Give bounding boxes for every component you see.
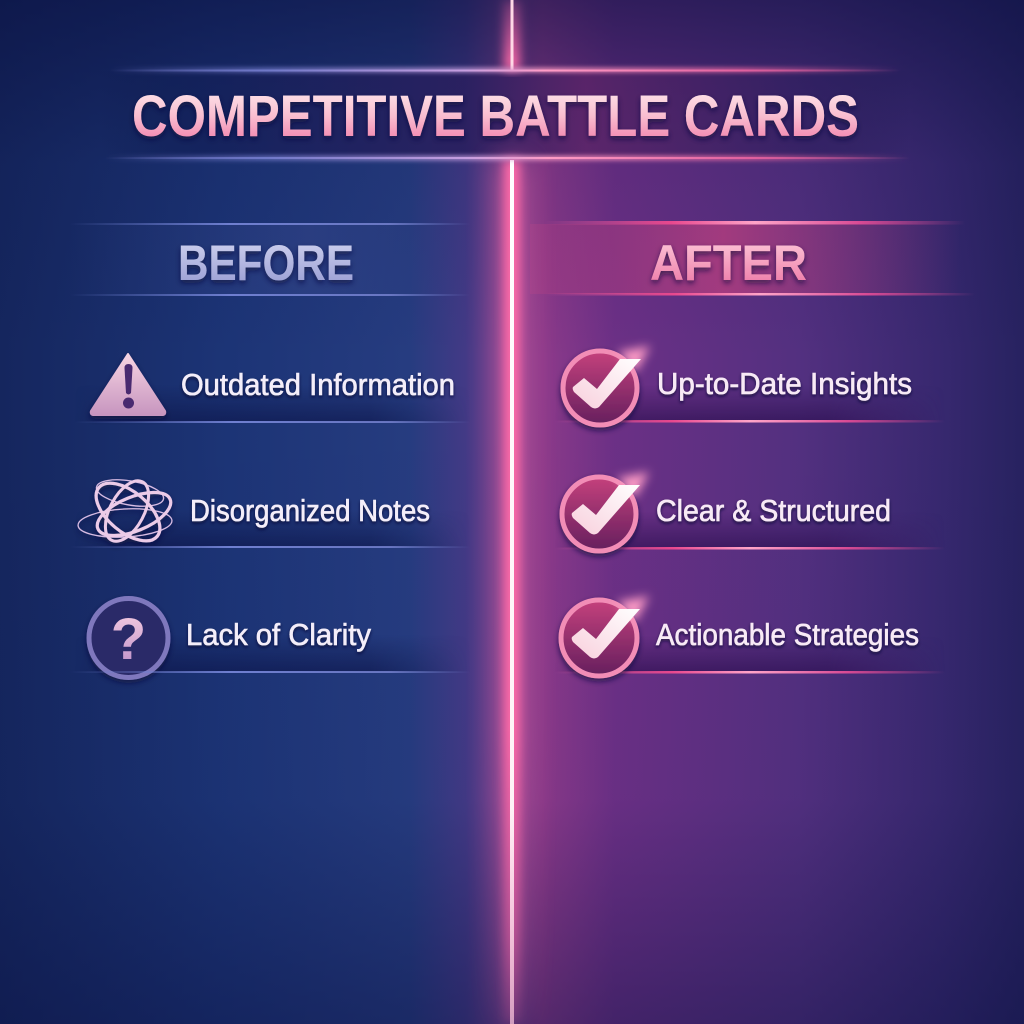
title rules bbox=[105, 68, 910, 160]
central divider bbox=[496, 0, 528, 1024]
rule bbox=[555, 420, 945, 422]
row: up-to-date insights bbox=[555, 346, 945, 425]
label: lack of clarity: Lack of Clarity bbox=[186, 617, 371, 652]
label: outdated information: Outdated Information bbox=[181, 367, 455, 402]
row: disorganized notes bbox=[70, 472, 470, 552]
row shadows left bbox=[100, 394, 448, 672]
rule bbox=[555, 671, 945, 674]
icon: question mark bbox=[89, 598, 168, 678]
rule bbox=[70, 546, 470, 548]
row: outdated information bbox=[75, 354, 470, 423]
after heading rules bbox=[545, 221, 975, 296]
row: clear and structured bbox=[555, 472, 945, 551]
label: actionable strategies: Actionable Strategies bbox=[656, 617, 919, 652]
rule bbox=[70, 671, 470, 673]
row: lack of clarity bbox=[70, 598, 470, 678]
after heading band bbox=[530, 224, 960, 294]
row: actionable strategies bbox=[555, 596, 945, 676]
title: COMPETITIVE BATTLE CARDS bbox=[132, 84, 859, 149]
row shadows right bbox=[564, 392, 904, 672]
header band bbox=[100, 71, 910, 158]
icon: check badge bbox=[562, 472, 649, 551]
rule bbox=[75, 421, 470, 423]
before heading rules bbox=[70, 223, 470, 296]
icon: warning triangle bbox=[91, 354, 165, 415]
label: clear and structured: Clear & Structured bbox=[656, 493, 891, 528]
label: up-to-date insights: Up-to-Date Insights bbox=[657, 366, 912, 401]
label: disorganized notes: Disorganized Notes bbox=[190, 493, 430, 528]
before heading band bbox=[70, 224, 470, 294]
after heading: AFTER bbox=[650, 235, 807, 291]
icon: question mark: ? bbox=[111, 607, 146, 672]
before heading: BEFORE bbox=[178, 235, 354, 291]
icon: tangled scribble bbox=[77, 472, 177, 552]
rule bbox=[555, 547, 945, 550]
icon: check badge bbox=[561, 596, 649, 676]
icon: check badge bbox=[563, 346, 650, 425]
